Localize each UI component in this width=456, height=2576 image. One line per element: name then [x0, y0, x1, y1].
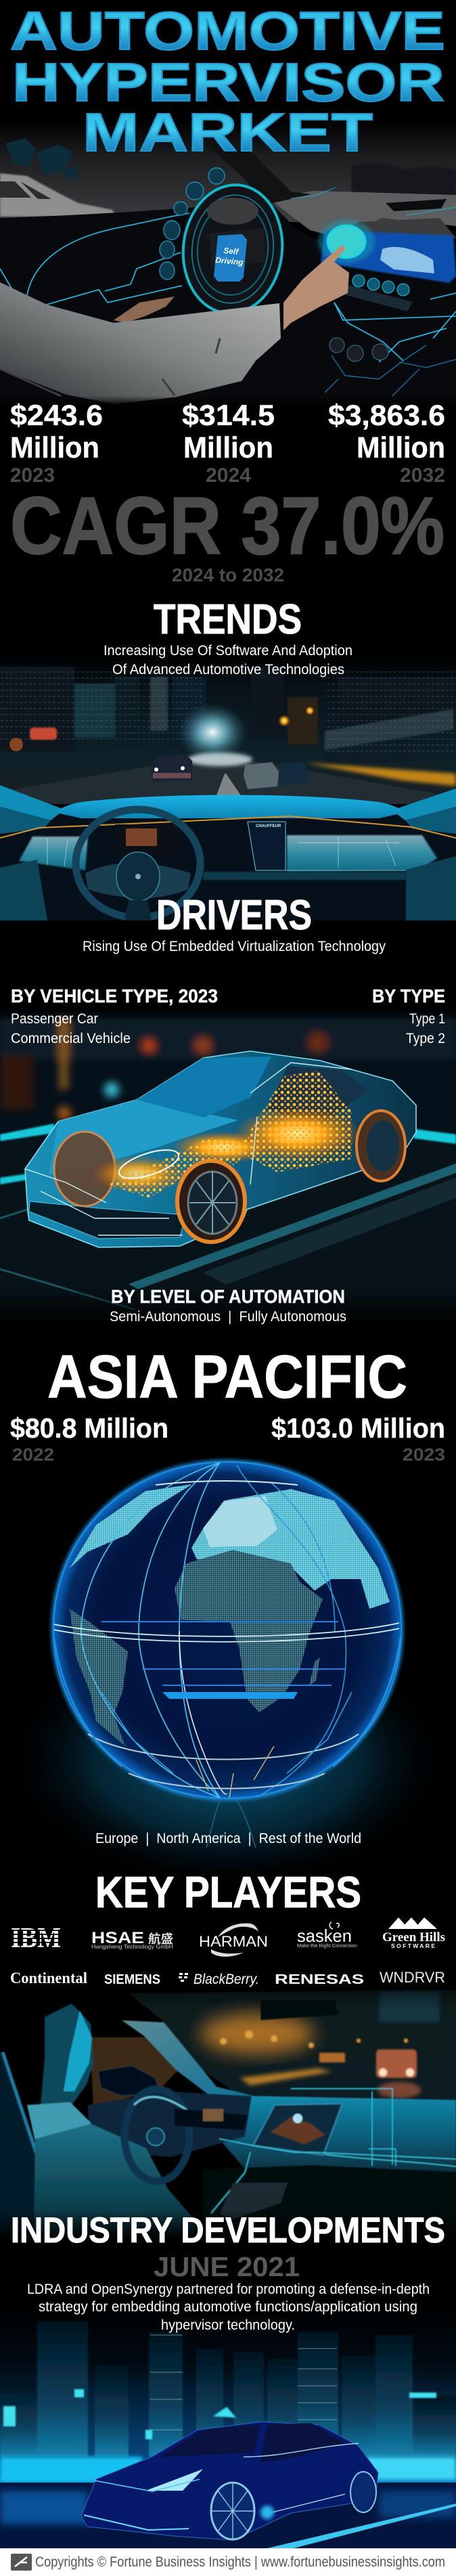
orange electronics glow [91, 1071, 363, 1198]
dash top cyan [54, 795, 406, 818]
right dash upper [274, 191, 456, 234]
city glow [200, 2014, 315, 2054]
asia pacific 2023 value: 2023 [403, 1444, 445, 1465]
driver face lit [64, 2010, 92, 2091]
sleeve fold [0, 338, 220, 396]
left buildings [0, 667, 455, 751]
left dashboard [0, 207, 196, 399]
a-pillar [214, 151, 311, 203]
left teal panel [19, 837, 88, 870]
driver shirt [34, 2124, 195, 2240]
footer logo [11, 2554, 32, 2571]
development text [27, 2282, 430, 2333]
key players heading: KEY PLAYERS [95, 1867, 361, 1917]
title line 1: AUTOMOTIVE [10, 1, 445, 61]
building window lines [150, 2335, 337, 2430]
road [210, 2059, 456, 2102]
building bright spots [3, 2389, 436, 2439]
logo: hsae: 航盛 [148, 1932, 173, 1946]
stat 2024: $314.5 [182, 399, 275, 432]
hero image: car interior with touch display [0, 120, 456, 409]
self driving badge: Driving [215, 255, 244, 267]
panel blueprint lines [47, 837, 419, 870]
dash lower dark [203, 2165, 456, 2246]
seat edge [3, 2052, 37, 2154]
stat 2023 [10, 399, 103, 487]
windshield [137, 1057, 271, 1117]
lower right side panel [406, 856, 456, 920]
stat 2024 [182, 399, 275, 487]
front wheel [177, 1161, 245, 1242]
logo: renesas: RENESAS [275, 1972, 364, 1987]
footer band [0, 2548, 456, 2576]
by vehicle type: Commercial Vehicle [11, 1031, 131, 1046]
dashboard body [0, 812, 456, 924]
title line 3: MARKET [83, 102, 373, 162]
industry developments image: hologram car in city [0, 2301, 456, 2548]
title line 2: HYPERVISOR [12, 52, 444, 112]
by vehicle type: BY VEHICLE TYPE, 2023 [11, 985, 218, 1006]
pointing hand [283, 245, 349, 330]
hologram car body [25, 1051, 416, 1247]
leading cars [319, 2049, 417, 2078]
teal floor bars [0, 1124, 456, 1184]
rear window [267, 1066, 369, 1124]
red sign [30, 728, 57, 740]
logo: sasken: sasken [297, 1926, 352, 1946]
cars on road [151, 754, 309, 795]
development text: hypervisor technology. [161, 2317, 295, 2333]
by type: BY TYPE [372, 985, 445, 1006]
street glow [180, 705, 245, 755]
dashboard [206, 2096, 456, 2172]
trends text: Increasing Use Of Software And Adoption [104, 643, 352, 659]
street lamps [278, 715, 290, 727]
front bumper dark [29, 1201, 185, 1239]
cagr period: 2024 to 2032 [172, 564, 284, 585]
gray sleeve [0, 282, 281, 404]
globe sphere [53, 1462, 401, 1798]
headlight outline [116, 1145, 182, 1184]
lower console knobs [329, 338, 388, 361]
blue road streak [267, 2504, 456, 2548]
body outlines [25, 1063, 352, 1235]
logo: harman: HARMAN [199, 1933, 268, 1950]
left hand [114, 296, 175, 323]
rear view mirror [260, 2000, 339, 2020]
hood highlight [49, 1100, 238, 1174]
center dark area [196, 203, 456, 407]
dash neon lines [211, 2139, 456, 2213]
by level of automation: Semi-Autonomous | Fully Autonomous [110, 1309, 346, 1325]
center info panel [248, 822, 286, 870]
console upper [321, 218, 456, 246]
driver seat [0, 2051, 78, 2240]
rear wheel [357, 1111, 405, 1181]
trends text [104, 643, 352, 678]
globe rim glow [53, 1462, 401, 1798]
parked white car [0, 173, 116, 217]
self driving badge [214, 234, 247, 282]
instrument cluster [175, 2108, 249, 2130]
logo: siemens: SIEMENS [104, 1972, 160, 1987]
logo: hsae: Hangsheng Technology GmbH [91, 1944, 173, 1950]
right building windows [325, 670, 456, 755]
by level of automation: BY LEVEL OF AUTOMATION [111, 1286, 345, 1307]
dashboard vent [386, 199, 447, 211]
floor [0, 1130, 456, 1333]
key players background image: driver at night [0, 1963, 456, 2248]
instrument cluster [115, 824, 177, 856]
stat 2024: 2024 [206, 464, 251, 487]
drivers text: Rising Use Of Embedded Virtualization Technology [83, 939, 386, 954]
holographic panels [291, 2089, 396, 2166]
by vehicle type car hologram image [0, 1008, 456, 1335]
striped rail [129, 1163, 456, 1289]
trends city street and dashboard image: CHAUFFEUR [256, 824, 281, 828]
skyline buildings [0, 2322, 456, 2457]
side dash [0, 807, 456, 834]
logo: hsae: HSAE [91, 1929, 144, 1947]
south america [70, 1609, 128, 1746]
central touch screen [253, 2104, 342, 2155]
steering wheel [76, 809, 200, 920]
asia pacific 2023 value [271, 1413, 445, 1465]
asia pacific 2023 value: $103.0 Million [271, 1413, 445, 1444]
right teal panel [287, 835, 437, 872]
north america [70, 1484, 192, 1568]
steering wheel [124, 2089, 195, 2181]
madagascar [309, 1658, 320, 1686]
logo: green hills: SOFTWARE [391, 1942, 435, 1949]
logo: sasken: Make the Right Connection [297, 1942, 357, 1949]
lower left side panel [0, 860, 47, 920]
bright lamps [220, 2030, 408, 2048]
stat 2032: $3,863.6 [328, 399, 445, 432]
performance touch button [318, 220, 375, 263]
by type: Type 2 [406, 1031, 445, 1046]
trends text: Of Advanced Automotive Technologies [112, 662, 344, 678]
asia pacific heading: ASIA PACIFIC [47, 1343, 407, 1411]
neon lines [0, 187, 456, 362]
logo: blackberry: BlackBerry. [193, 1972, 259, 1987]
bright base [162, 1692, 298, 1699]
interface icons [160, 168, 225, 280]
lower console lines [325, 345, 456, 396]
logo: wind river: WNDRVR [380, 1969, 445, 1986]
orange light strip [304, 763, 456, 786]
blue car [81, 2422, 378, 2540]
lower dash [203, 872, 406, 880]
trends city street and dashboard image [0, 653, 456, 924]
africa [175, 1550, 323, 1712]
stat 2024: Million [183, 431, 273, 464]
logo: green hills [382, 1917, 445, 1949]
dash left [88, 2091, 252, 2157]
by type [372, 985, 445, 1046]
windshield pillars [0, 785, 456, 820]
side window [90, 2037, 177, 2107]
by vehicle type: Passenger Car [11, 1011, 98, 1027]
asia pacific 2022 value: 2022 [12, 1444, 54, 1465]
a-pillar [122, 2020, 254, 2096]
eurasia [191, 1489, 390, 1609]
stat 2023: 2023 [10, 464, 55, 487]
reflected bright patch [0, 2491, 88, 2525]
stat 2023: $243.6 [10, 399, 103, 432]
asia pacific 2022 value: $80.8 Million [10, 1413, 168, 1444]
front wheel inner [54, 1132, 115, 1206]
development text: strategy for embedding automotive functions/application using [39, 2299, 417, 2315]
distant buildings [379, 1992, 440, 2022]
logo: green hills: Green Hills [382, 1930, 445, 1945]
lower reflection [0, 2483, 456, 2548]
driver head [41, 2003, 93, 2105]
europe bright [203, 1496, 277, 1547]
building windows [1, 671, 202, 739]
logo: ibm: IBM [11, 1923, 61, 1954]
development text: LDRA and OpenSynergy partnered for promoting a defense-in-depth [27, 2282, 430, 2297]
car reflection [378, 2082, 421, 2098]
asia pacific 2022 value [10, 1413, 168, 1465]
center console [220, 2183, 288, 2220]
driver collar [27, 2102, 91, 2141]
stat 2032: Million [357, 431, 445, 464]
center touch display [321, 230, 456, 311]
date: JUNE 2021 [154, 2251, 300, 2282]
drivers heading: DRIVERS [156, 892, 312, 939]
by type: Type 1 [409, 1011, 445, 1027]
other regions: Europe | North America | Rest of the World [95, 1831, 361, 1846]
globe [4, 1462, 451, 1888]
road [13, 761, 438, 804]
globe halo [4, 1631, 451, 1888]
stat 2032 [328, 399, 445, 487]
stat 2032: 2032 [400, 464, 445, 487]
dash orange trim [0, 816, 456, 838]
by vehicle type [11, 985, 218, 1046]
windshield night scene [129, 1990, 456, 2102]
trends heading: TRENDS [154, 596, 302, 643]
meridians and parallels [54, 1463, 401, 1848]
stat 2023: Million [10, 431, 99, 464]
glowing road bars [0, 2457, 456, 2483]
car window [0, 181, 51, 199]
self driving badge: Self [223, 246, 240, 257]
distant skyline [352, 163, 456, 197]
side mirror [98, 2066, 160, 2095]
logo: harman [199, 1924, 268, 1957]
by level of automation [110, 1286, 346, 1325]
road light streak [240, 2068, 332, 2085]
logo: hsae [91, 1929, 173, 1950]
steering wheel [181, 183, 284, 311]
faint world map [5, 138, 78, 180]
logo: continental: Continental [10, 1970, 87, 1986]
blurred background lights [0, 1015, 456, 1120]
